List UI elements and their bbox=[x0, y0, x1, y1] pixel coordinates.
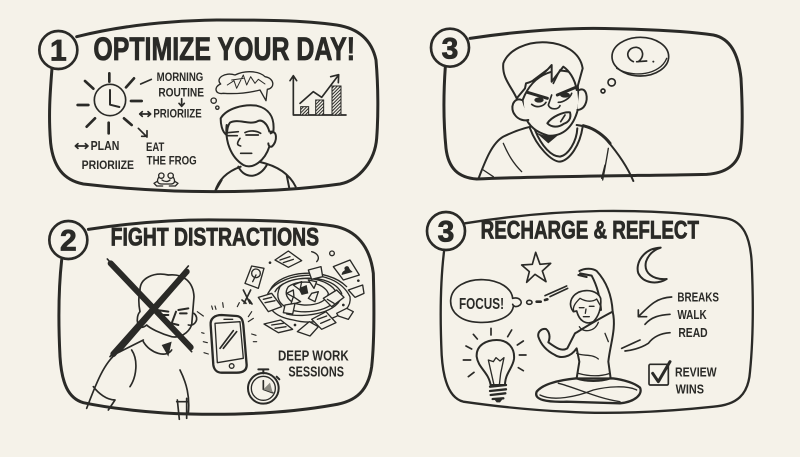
person crossed out bbox=[87, 274, 197, 419]
person: seated stretching figure bbox=[536, 269, 641, 403]
label: breaks walk read bbox=[677, 290, 719, 340]
step number 2 bbox=[49, 221, 87, 259]
checkbox: review wins: WINS bbox=[676, 382, 704, 397]
label: deep work sessions: DEEP WORK bbox=[278, 349, 349, 365]
big X mark bbox=[107, 259, 192, 357]
panel 4: recharge and reflect bbox=[427, 211, 753, 413]
label: prioritize: PRIORIIZE bbox=[82, 158, 134, 172]
thought bubble bbox=[601, 37, 669, 93]
panel outline bbox=[441, 211, 753, 413]
label: deep work sessions: SESSIONS bbox=[288, 365, 344, 381]
arrow to eat the frog bbox=[138, 128, 147, 137]
thought cloud with squiggle bbox=[211, 72, 273, 109]
label: prioritize with arrow: PRIORIIZE bbox=[153, 107, 202, 121]
label: morning routine bbox=[157, 70, 204, 100]
arrows to activities bbox=[622, 297, 672, 351]
checkbox: review wins bbox=[649, 362, 717, 397]
thought bubble: focus: FOCUS! bbox=[459, 296, 504, 313]
label: morning routine: ROUTINE bbox=[158, 86, 204, 100]
label: breaks walk read: WALK bbox=[677, 307, 707, 322]
title: FIGHT DISTRACTIONS bbox=[111, 224, 319, 252]
label: breaks walk read: BREAKS bbox=[677, 290, 719, 305]
distraction swirl bbox=[245, 251, 364, 336]
label: prioritize with arrow bbox=[140, 107, 202, 121]
icon: frog bbox=[154, 173, 178, 186]
person: angry face bbox=[478, 42, 633, 181]
icon: growth bar chart bbox=[290, 75, 346, 115]
step number 3: 3 bbox=[442, 32, 458, 65]
arrow down bbox=[179, 99, 184, 106]
icon: star bbox=[522, 252, 551, 282]
label: breaks walk read: READ bbox=[678, 325, 708, 340]
step number 3 bbox=[431, 29, 469, 67]
panel 3: fight distractions bbox=[49, 220, 374, 419]
label: eat the frog: THE FROG bbox=[147, 154, 197, 168]
thought bubble: focus bbox=[451, 280, 568, 322]
checkbox: review wins: REVIEW bbox=[675, 365, 717, 380]
panel 1: optimize your day bbox=[39, 20, 378, 192]
panel outline bbox=[444, 28, 742, 179]
step number 3: 3 bbox=[438, 216, 454, 249]
panel 1 outline bbox=[50, 20, 378, 192]
connector line bbox=[141, 79, 151, 84]
step number 1 bbox=[39, 31, 77, 69]
panel outline bbox=[59, 220, 374, 414]
step number 2: 2 bbox=[60, 225, 77, 258]
icon: scissors bbox=[242, 290, 252, 304]
title: RECHARGE & REFLECT bbox=[481, 216, 699, 244]
person: tired face bbox=[215, 105, 296, 192]
label: deep work sessions bbox=[278, 349, 349, 381]
step number 1: 1 bbox=[50, 35, 67, 68]
icon: smartphone bbox=[197, 303, 257, 373]
step number 3 bbox=[427, 212, 465, 250]
icon: sun clock bbox=[78, 73, 142, 133]
label: plan bbox=[75, 139, 119, 153]
icon: crescent moon bbox=[638, 248, 667, 282]
panel 2: angry person bbox=[431, 28, 742, 181]
title: OPTIMIZE YOUR DAY! bbox=[93, 31, 355, 67]
label: eat the frog bbox=[146, 140, 197, 168]
icon: light bulb bbox=[463, 328, 526, 402]
icon: stopwatch bbox=[248, 369, 279, 404]
label: morning routine: MORNING bbox=[157, 70, 203, 84]
label: plan: PLAN bbox=[91, 139, 119, 153]
label: eat the frog: EAT bbox=[146, 140, 165, 154]
